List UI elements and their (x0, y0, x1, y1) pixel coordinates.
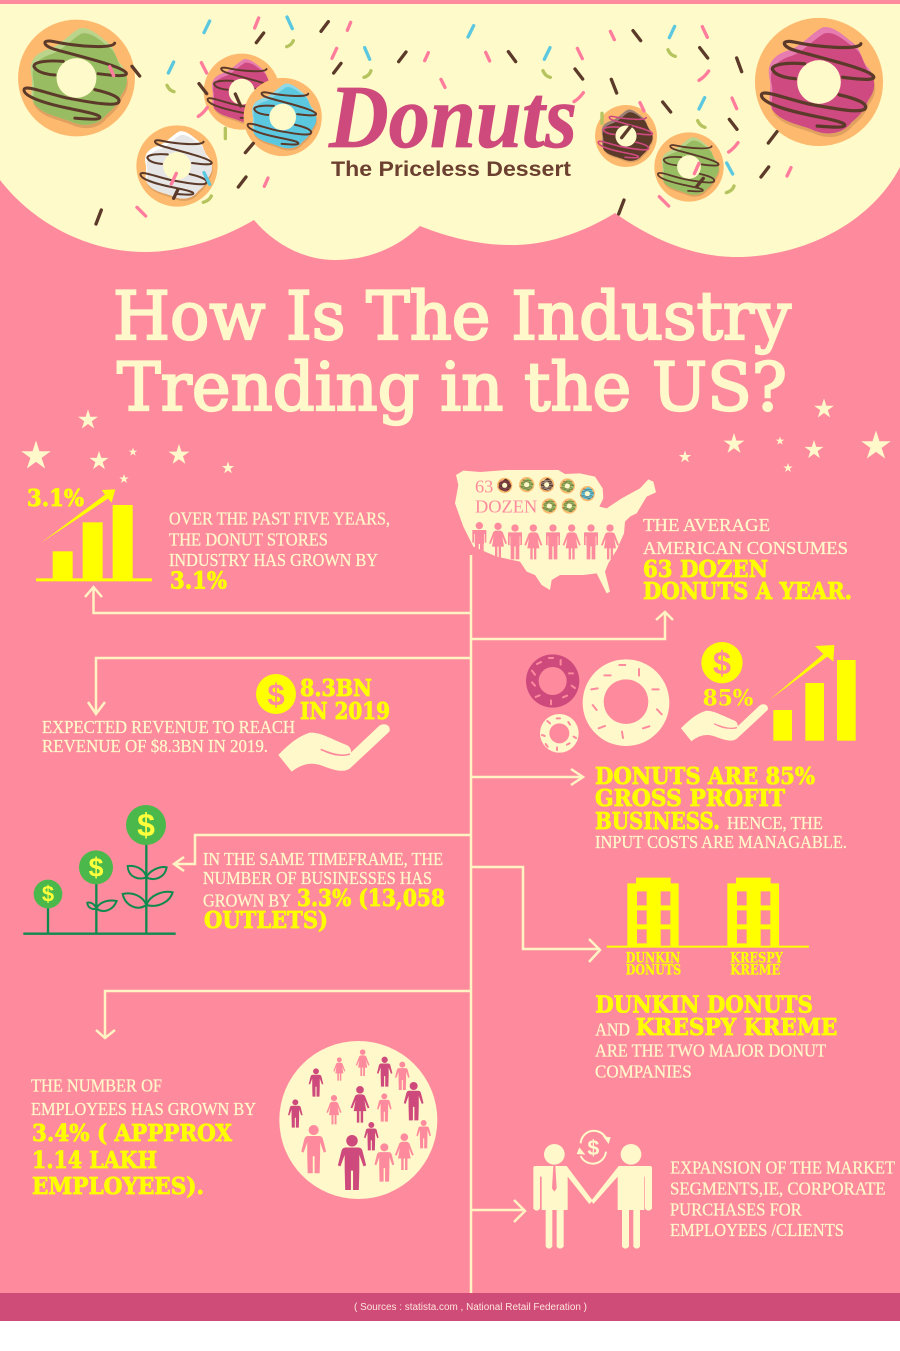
labels: company names: DONUTS (626, 963, 681, 979)
connector lines and arrows (85, 555, 673, 1293)
text: number of businesses: OUTLETS) (204, 907, 328, 934)
icon: hand with revenue coin: $ (267, 677, 285, 712)
text: gross profit (595, 763, 847, 852)
text: number of businesses (203, 849, 445, 934)
text: major companies: AND (595, 1020, 630, 1040)
text: employees growth: EMPLOYEES). (32, 1173, 204, 1200)
text: five year growth: THE DONUT STORES (169, 530, 328, 550)
text: major companies: DUNKIN DONUTS (595, 991, 813, 1018)
icon: three plain donuts (526, 654, 669, 753)
icon: blue donut (244, 78, 322, 156)
text: donut consumption: 63 DOZEN (643, 556, 768, 583)
text: number of businesses: GROWN BY (203, 890, 291, 910)
icon: big green donut (18, 20, 135, 136)
text: number of businesses: NUMBER OF BUSINESSES HAS (203, 868, 432, 888)
icon: US map with donuts and people: DOZEN (475, 496, 537, 516)
sprinkles right (468, 26, 791, 214)
stars (21, 398, 891, 483)
text: market expansion: EMPLOYEES /CLIENTS (670, 1220, 844, 1240)
text: gross profit: INPUT COSTS ARE MANAGABLE. (595, 832, 847, 852)
icon: hand with 85% coin and rising bars: $ (713, 644, 731, 681)
text: major companies (595, 991, 837, 1081)
icon: magenta donut (204, 54, 280, 130)
text: employees growth: THE NUMBER OF (31, 1076, 162, 1096)
icon: growth bar chart (36, 489, 152, 581)
heading (113, 278, 792, 426)
icon: hand with 85% coin and rising bars (681, 642, 856, 741)
title: Donuts: Donuts (328, 68, 577, 167)
text: market expansion: SEGMENTS,IE, CORPORATE (670, 1178, 886, 1198)
labels: company names: KRESPY (730, 951, 783, 967)
header cloud (0, 4, 900, 260)
text: expected revenue: EXPECTED REVENUE TO REACH (42, 717, 295, 737)
icon: US map with donuts and people: 63 (475, 476, 493, 496)
text: employees growth: 1.14 LAKH (32, 1147, 157, 1174)
icon: white donut (136, 125, 218, 207)
labels: company names: DUNKIN (626, 951, 680, 967)
icon: handshake with money exchange: $ (587, 1136, 599, 1160)
text: gross profit: BUSINESS. (595, 808, 720, 835)
text: employees growth: EMPLOYEES HAS GROWN BY (31, 1099, 256, 1119)
heading: Trending in the US? (117, 349, 787, 426)
icon: hand with 85% coin and rising bars: 85% (703, 686, 753, 712)
text: five year growth: OVER THE PAST FIVE YEARS, (169, 508, 390, 528)
icon: money plants: $ (42, 882, 54, 907)
icon: small green donut (654, 132, 724, 202)
text: expected revenue (42, 717, 295, 756)
stat: 8.3BN in 2019: IN 2019 (300, 698, 390, 725)
icon: US map with donuts and people (455, 470, 656, 593)
icon: two company buildings (607, 878, 809, 948)
text: five year growth: 3.1% (170, 568, 227, 594)
text: employees growth (31, 1076, 256, 1200)
text: donut consumption: AMERICAN CONSUMES (643, 538, 848, 558)
text: market expansion: PURCHASES FOR (670, 1199, 802, 1219)
text: major companies: KRESPY KREME (636, 1014, 837, 1041)
icon: money plants: $ (89, 853, 104, 883)
icon: handshake with money exchange (533, 1131, 652, 1249)
text: gross profit: GROSS PROFIT (595, 785, 785, 812)
text: number of businesses: 3.3% (13,058 (297, 885, 445, 912)
icon: crowd of employees (279, 1041, 437, 1199)
icon: big pink donut (755, 18, 883, 146)
text: expected revenue: REVENUE OF $8.3BN IN 2019. (42, 736, 268, 756)
text: five year growth: INDUSTRY HAS GROWN BY (169, 550, 378, 570)
text: market expansion (670, 1158, 895, 1240)
footer bar (0, 1293, 900, 1321)
text: employees growth: 3.4% ( APPPROX (32, 1120, 232, 1147)
text: number of businesses: IN THE SAME TIMEFRAME, THE (203, 849, 443, 869)
text: major companies: COMPANIES (595, 1061, 692, 1081)
labels: company names: KREME (730, 963, 780, 979)
footer sources: ( Sources : statista.com , National Retail Federation ) (354, 1302, 587, 1313)
icon: money plants (23, 805, 176, 934)
stat: 8.3BN in 2019 (300, 675, 390, 725)
text: five year growth (169, 508, 390, 594)
stat: 8.3BN in 2019: 8.3BN (300, 675, 372, 702)
heading: How Is The Industry (113, 278, 792, 355)
text: donut consumption: THE AVERAGE (643, 515, 770, 535)
text: donut consumption (643, 515, 852, 605)
icon: money plants: $ (137, 807, 155, 843)
subtitle: The Priceless Dessert (331, 158, 571, 181)
labels: company names (626, 951, 783, 979)
icon: chocolate donut (595, 105, 657, 167)
text: donut consumption: DONUTS A YEAR. (643, 578, 852, 605)
text: gross profit: HENCE, THE (727, 813, 823, 833)
stat: 3.1% chart label: 3.1% (27, 485, 84, 512)
sprinkles left (96, 17, 445, 224)
text: gross profit: DONUTS ARE 85% (595, 763, 815, 790)
icon: hand with revenue coin (256, 674, 390, 772)
text: major companies: ARE THE TWO MAJOR DONUT (595, 1041, 826, 1061)
